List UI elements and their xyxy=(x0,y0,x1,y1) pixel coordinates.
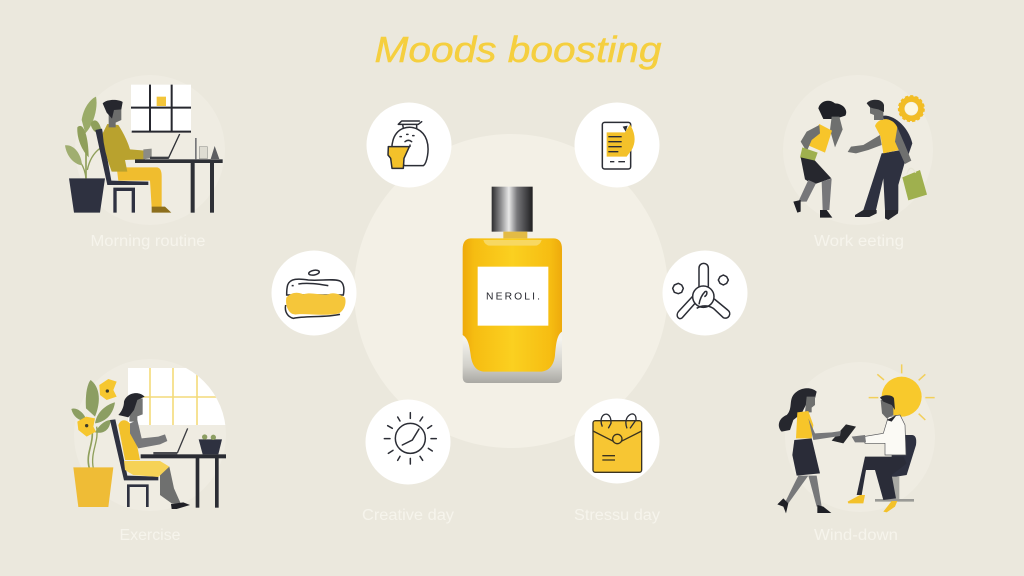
bottle glass xyxy=(463,238,562,383)
label: morning routine: Morning routine xyxy=(90,233,206,250)
panel: morning routine xyxy=(65,75,225,250)
illustration: two people with bag and gear sun xyxy=(793,97,927,220)
panel: central circle xyxy=(354,134,668,448)
bottle cap xyxy=(492,187,533,232)
perfume bottle xyxy=(463,187,562,383)
bottle liquid xyxy=(463,238,562,372)
title: Moods boosting xyxy=(374,29,662,70)
label: stressful day: Stressu day xyxy=(574,507,660,524)
label: creative day: Creative day xyxy=(362,507,454,524)
illustration: woman handing tablet to seated man with sun xyxy=(777,364,935,513)
bottle label xyxy=(478,267,548,326)
icon: envelope bag xyxy=(574,398,660,484)
illustration: woman at desk with flower xyxy=(71,379,226,509)
label: wind-down: Wind-down xyxy=(814,527,898,544)
panel: exercise xyxy=(71,359,229,544)
window xyxy=(128,368,229,425)
icon: phone with note xyxy=(574,102,660,188)
icon: clock sun xyxy=(366,400,450,484)
perfume bottle: NEROLI. xyxy=(486,291,540,302)
shopping bag xyxy=(902,170,927,200)
icon: propeller xyxy=(662,250,748,336)
panel: work eeting xyxy=(783,75,933,250)
panel: wind-down xyxy=(777,362,935,544)
icon: head with cup xyxy=(366,102,452,188)
illustration: person at desk with plant xyxy=(65,85,223,213)
label: exercise: Exercise xyxy=(120,527,180,544)
icon: soap bar xyxy=(272,250,356,336)
label: work eeting: Work eeting xyxy=(814,233,904,250)
